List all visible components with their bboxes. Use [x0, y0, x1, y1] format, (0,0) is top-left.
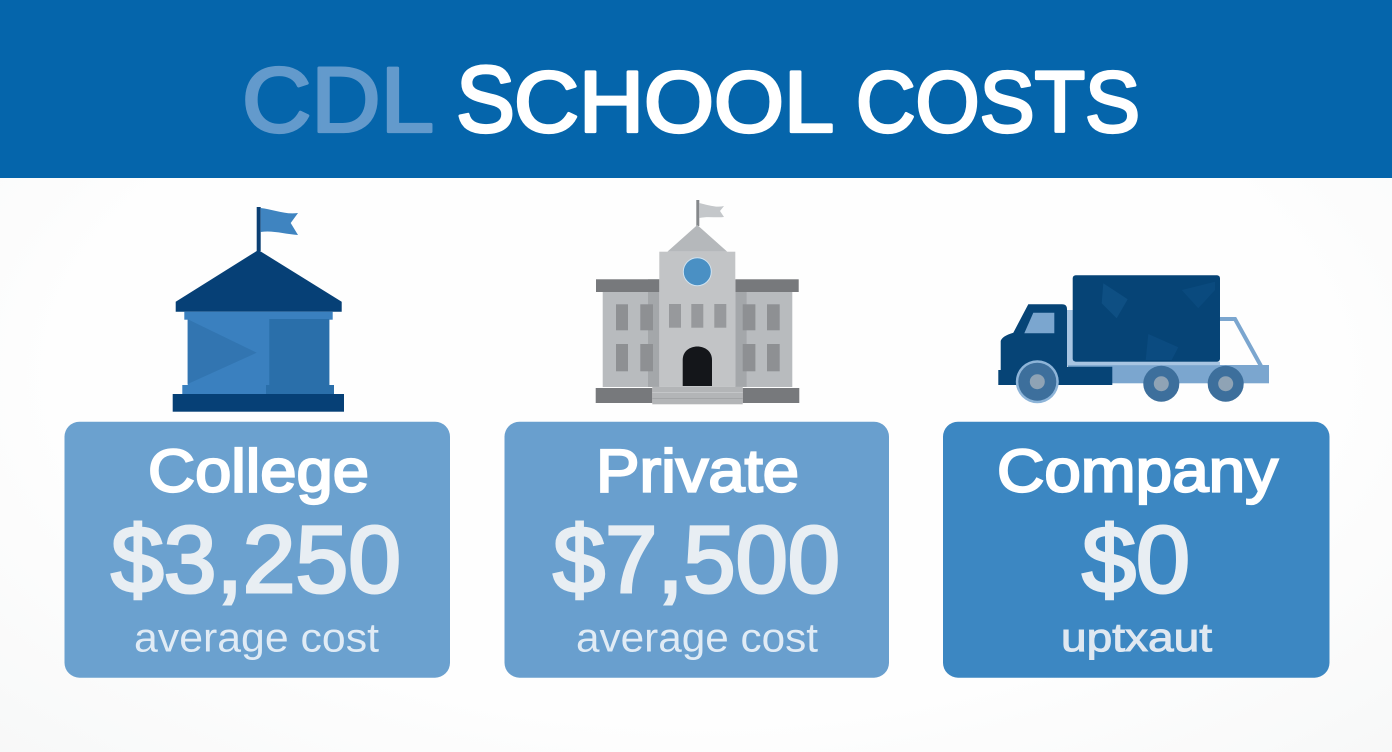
title: CDL: [242, 50, 434, 152]
icon: college building: [173, 207, 344, 412]
header banner: [0, 0, 1392, 178]
amount: company: $0: [1082, 507, 1190, 613]
panel: college: [64, 207, 450, 678]
card: college: [64, 422, 450, 678]
caption: private: average cost: [576, 614, 819, 660]
icon: private school building: [596, 200, 799, 404]
amount: college: $3,250: [111, 507, 401, 613]
icon: truck: [998, 275, 1269, 403]
title: CHOOL: [514, 54, 834, 150]
caption: college: average cost: [134, 614, 380, 660]
title: S: [456, 46, 515, 152]
panel: private: [504, 200, 889, 678]
label: college: College: [148, 438, 369, 504]
title: [242, 46, 1140, 152]
amount: private: $7,500: [553, 507, 840, 613]
caption: company: uptxaut: [1061, 616, 1212, 660]
title: COSTS: [856, 54, 1140, 150]
clock: [683, 258, 711, 286]
panel: company: [943, 275, 1330, 678]
label: company: Company: [997, 438, 1278, 504]
card: private: [504, 422, 889, 678]
door: [683, 346, 712, 386]
card: company: [943, 422, 1330, 678]
label: private: Private: [596, 438, 799, 504]
